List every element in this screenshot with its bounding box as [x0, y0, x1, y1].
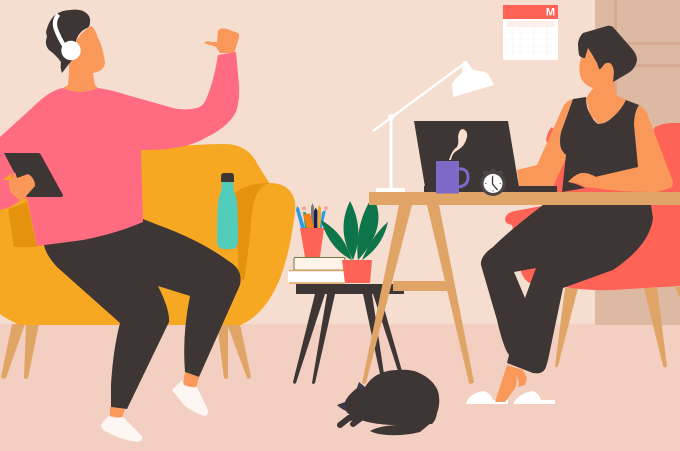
pencil cup — [296, 203, 328, 257]
woman — [466, 26, 673, 404]
water bottle — [217, 173, 238, 249]
side table — [293, 284, 404, 384]
chair legs — [555, 287, 680, 368]
calendar: M — [546, 6, 555, 18]
man's sweater — [0, 52, 239, 246]
sofa body — [0, 144, 290, 325]
woman's hair — [578, 26, 637, 82]
stylus — [3, 173, 12, 180]
laptop — [414, 121, 557, 192]
chair seat and back — [505, 123, 680, 290]
man's left hand — [9, 172, 35, 200]
woman's hand — [568, 173, 596, 188]
floor — [0, 324, 680, 451]
woman's feet — [495, 365, 527, 402]
calendar — [503, 5, 558, 60]
coffee mug — [436, 161, 468, 194]
desk lamp — [373, 61, 494, 192]
man's hair — [46, 10, 90, 73]
woman's front arm — [582, 105, 673, 192]
sofa dark inner panels — [8, 202, 37, 247]
wall background — [0, 0, 680, 324]
man's raised hand — [204, 28, 239, 53]
sofa right arm — [238, 183, 295, 325]
woman's trousers — [481, 205, 653, 373]
man's neck and face — [63, 26, 105, 92]
alarm clock — [480, 168, 506, 196]
cat's ears — [358, 383, 364, 390]
armchair: sofa — [0, 144, 295, 379]
man's trousers — [44, 219, 241, 409]
woman's sleeveless top — [560, 97, 639, 192]
steam — [449, 129, 467, 160]
sofa legs — [1, 324, 251, 379]
slippers — [466, 391, 555, 404]
man's ankles — [110, 407, 125, 418]
books — [288, 258, 345, 284]
tablet — [4, 153, 63, 197]
cat's paws — [340, 417, 361, 425]
headphones — [55, 14, 81, 60]
man's shoes — [101, 380, 208, 442]
potted plant — [321, 196, 388, 283]
cat's eyes — [355, 401, 368, 411]
door — [595, 0, 680, 325]
woman's back arm — [517, 99, 573, 187]
cat's tail — [370, 422, 432, 435]
office chair — [505, 123, 680, 367]
cat — [337, 370, 439, 435]
woman's neck and face — [579, 40, 627, 125]
desk top — [369, 192, 680, 205]
cat's body — [337, 370, 439, 425]
desk legs and crossbar — [362, 205, 474, 384]
man — [0, 10, 241, 442]
